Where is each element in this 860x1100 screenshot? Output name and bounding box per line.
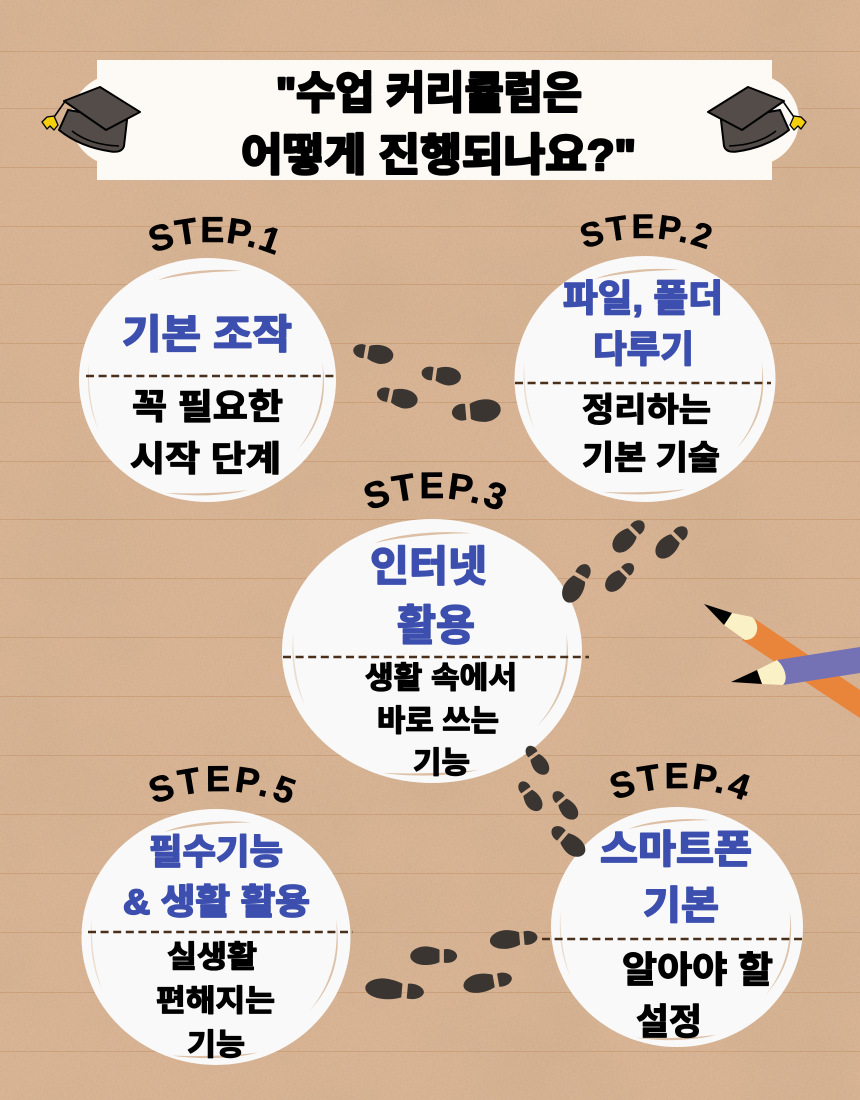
title text: "수업 커리큘럼은 (276, 69, 582, 118)
step 1 description: 꼭 필요한 (132, 388, 283, 427)
step 3 heading: 활용 (397, 602, 475, 649)
step 4 label: STEP.4 (610, 762, 750, 800)
step 1 description: 시작 단계 (130, 440, 281, 479)
step 4 heading: 스마트폰 (600, 829, 752, 872)
step 3 description: 생활 속에서 (365, 662, 517, 695)
icon: pencils (704, 604, 860, 718)
step 5 description: 기능 (187, 1029, 245, 1062)
step 1 heading: 기본 조작 (122, 313, 292, 357)
step 2 description: 정리하는 (582, 391, 711, 428)
step 5 heading (123, 833, 310, 922)
step 5 heading: & 생활 활용 (123, 883, 310, 922)
step 4 heading: 기본 (643, 885, 719, 928)
step 4 description: 설정 (636, 1001, 702, 1042)
step 5 description: 편해지는 (156, 985, 275, 1018)
step 3 description (365, 662, 517, 780)
panel: step 1 (79, 216, 336, 502)
title banner (71, 60, 799, 180)
icon: footprints step 4 to 5 (365, 927, 538, 1002)
panel: step 4 (542, 762, 803, 1047)
step 3 description: 바로 쓰는 (377, 705, 499, 738)
step 4 heading (600, 829, 752, 928)
step 5 description (156, 941, 275, 1062)
step 2 description: 기본 기술 (582, 439, 720, 476)
icon: footprints step 3 to 4 (514, 742, 589, 862)
step 5 label: STEP.5 (150, 766, 296, 803)
step 4 description (622, 949, 773, 1042)
icon: graduation cap right (708, 87, 806, 152)
title text (241, 69, 636, 180)
step 3 heading (370, 543, 487, 649)
step 5 heading: 필수기능 (149, 833, 283, 872)
step 2 heading (563, 278, 723, 370)
step 3 heading: 인터넷 (370, 543, 487, 590)
step 3 description: 기능 (413, 747, 470, 780)
step 2 heading: 다루기 (593, 329, 694, 370)
step 1 label: STEP.1 (149, 216, 278, 255)
step 3 label: STEP.3 (364, 472, 506, 510)
step 2 description (582, 391, 720, 476)
step 4 description: 알아야 할 (622, 949, 773, 990)
title text: 어떻게 진행되나요?" (241, 131, 636, 180)
icon: footprints step 1 to 2 (352, 341, 502, 425)
panel: step 2 (514, 214, 776, 502)
step 1 description (130, 388, 283, 479)
step 2 heading: 파일, 폴더 (563, 278, 723, 319)
icon: footprints step 2 to 3 (557, 515, 693, 606)
panel: step 3 (282, 472, 589, 783)
step 5 description: 실생활 (167, 941, 257, 974)
icon: graduation cap left (42, 87, 140, 152)
step 2 label: STEP.2 (580, 214, 712, 250)
panel: step 5 (82, 766, 353, 1065)
